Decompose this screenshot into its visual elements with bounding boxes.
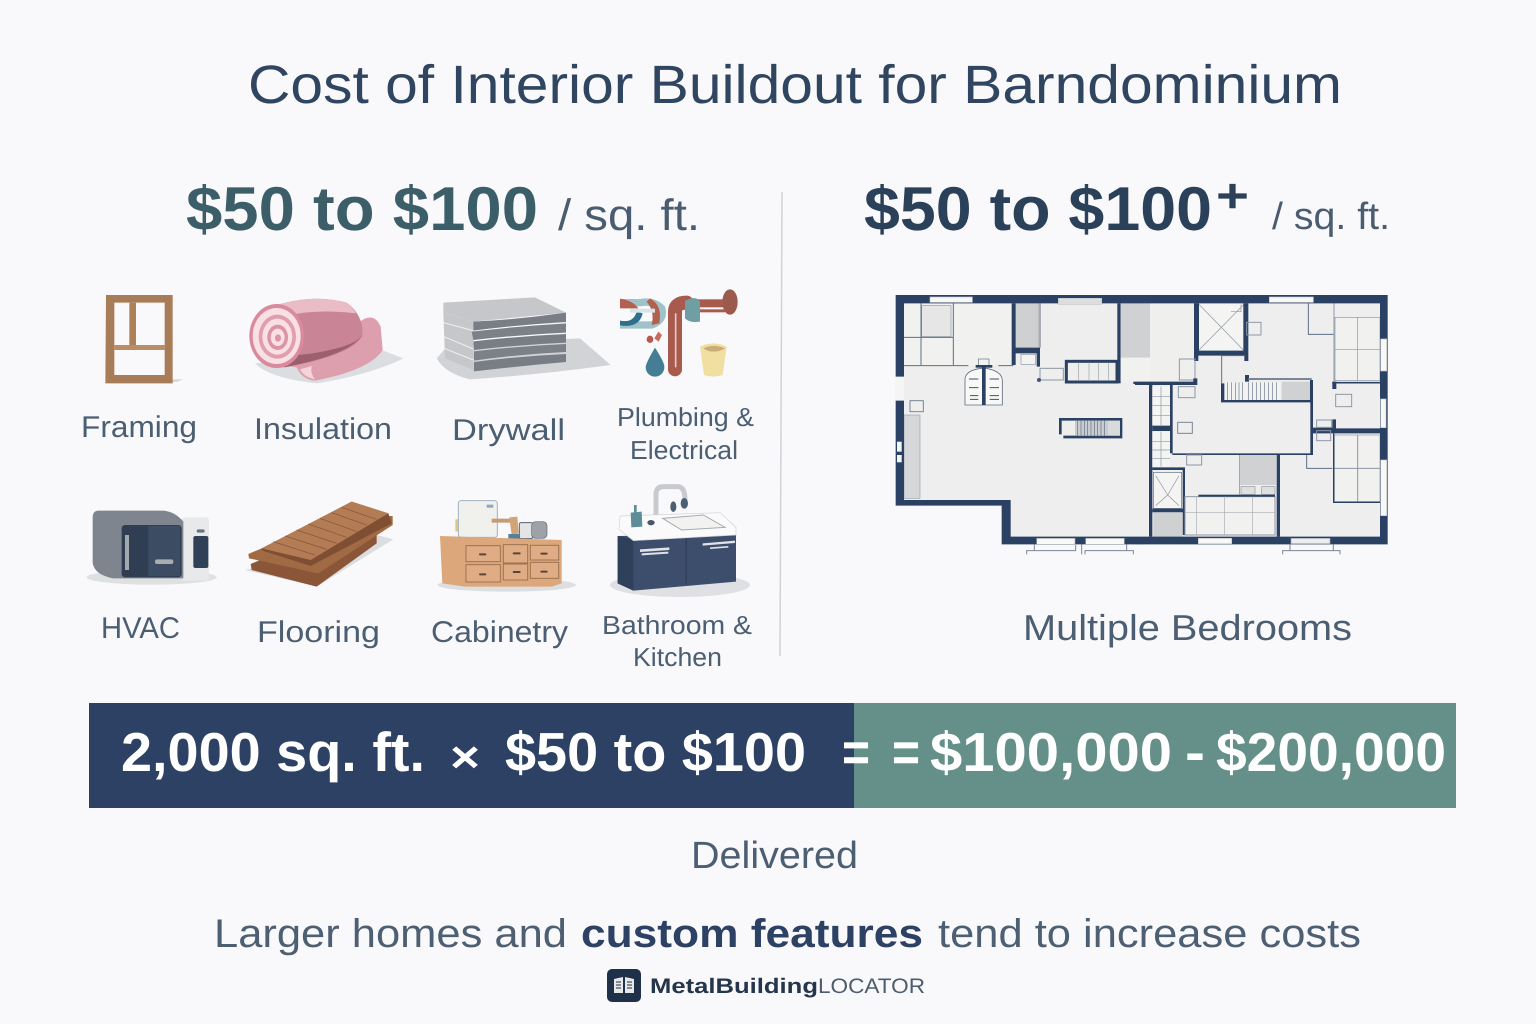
logo wordmark: MetalBuilding [650, 975, 818, 998]
formula bar [89, 703, 1456, 808]
label: delivered: Delivered [691, 835, 858, 877]
formula text: 2,000 sq. ft. [121, 721, 425, 783]
icon: plumbing and electrical [620, 289, 738, 377]
label: hvac: HVAC [101, 612, 180, 645]
label: bathroom and kitchen: Kitchen [633, 642, 722, 672]
label: drywall: Drywall [452, 414, 565, 447]
heading: right price: $50 to $100 [864, 175, 1212, 244]
icon: insulation [249, 299, 403, 383]
formula text: $100,000 [930, 721, 1172, 783]
footer note: custom features [581, 912, 923, 956]
floor plan [896, 295, 1388, 554]
floor plan: east half [1135, 295, 1388, 554]
logo wordmark [650, 975, 925, 998]
title: Cost of Interior Buildout for Barndominium [248, 55, 1342, 115]
label: bathroom and kitchen: Bathroom & [602, 610, 752, 640]
footer note [214, 912, 1361, 956]
icon: logo mark [607, 969, 641, 1002]
icon: drywall [437, 297, 611, 379]
label: flooring: Flooring [257, 616, 380, 649]
formula text: $50 to $100 [505, 721, 806, 783]
label: plumbing and electrical: Electrical [630, 435, 738, 465]
bar segment: navy [89, 703, 855, 808]
outer walls [896, 295, 1145, 544]
label: cabinetry: Cabinetry [431, 616, 568, 649]
footer note: tend to increase costs [938, 912, 1361, 956]
heading: left price: / sq. ft. [558, 191, 700, 240]
heading: left price [186, 175, 700, 244]
icon: hvac [87, 511, 217, 585]
formula text: - [1185, 721, 1205, 783]
footer note: Larger homes and [214, 912, 567, 956]
formula text: = [842, 721, 870, 783]
bar segment: teal [854, 703, 1456, 808]
icon: cabinetry [437, 501, 576, 592]
formula text [121, 721, 1446, 783]
label: multiple bedrooms: Multiple Bedrooms [1023, 607, 1352, 648]
label: framing: Framing [81, 411, 197, 444]
heading: right price: / sq. ft. [1272, 196, 1390, 238]
icon: flooring [245, 502, 393, 587]
formula text: = [892, 721, 920, 783]
icon: bathroom and kitchen [610, 487, 750, 597]
outer walls [1135, 295, 1388, 544]
formula text: × [450, 733, 480, 782]
heading: right price [864, 170, 1390, 244]
floor plan: west half [896, 295, 1145, 554]
icon: framing [105, 295, 183, 383]
label: insulation: Insulation [254, 413, 392, 446]
label: plumbing and electrical: Plumbing & [617, 402, 754, 432]
logo [607, 969, 925, 1002]
logo wordmark: LOCATOR [818, 975, 925, 998]
heading: right price: + [1216, 170, 1249, 223]
heading: left price: $50 to $100 [186, 175, 538, 244]
formula text: $200,000 [1216, 721, 1446, 783]
label: plumbing and electrical [617, 402, 754, 465]
label: bathroom and kitchen [602, 610, 752, 672]
